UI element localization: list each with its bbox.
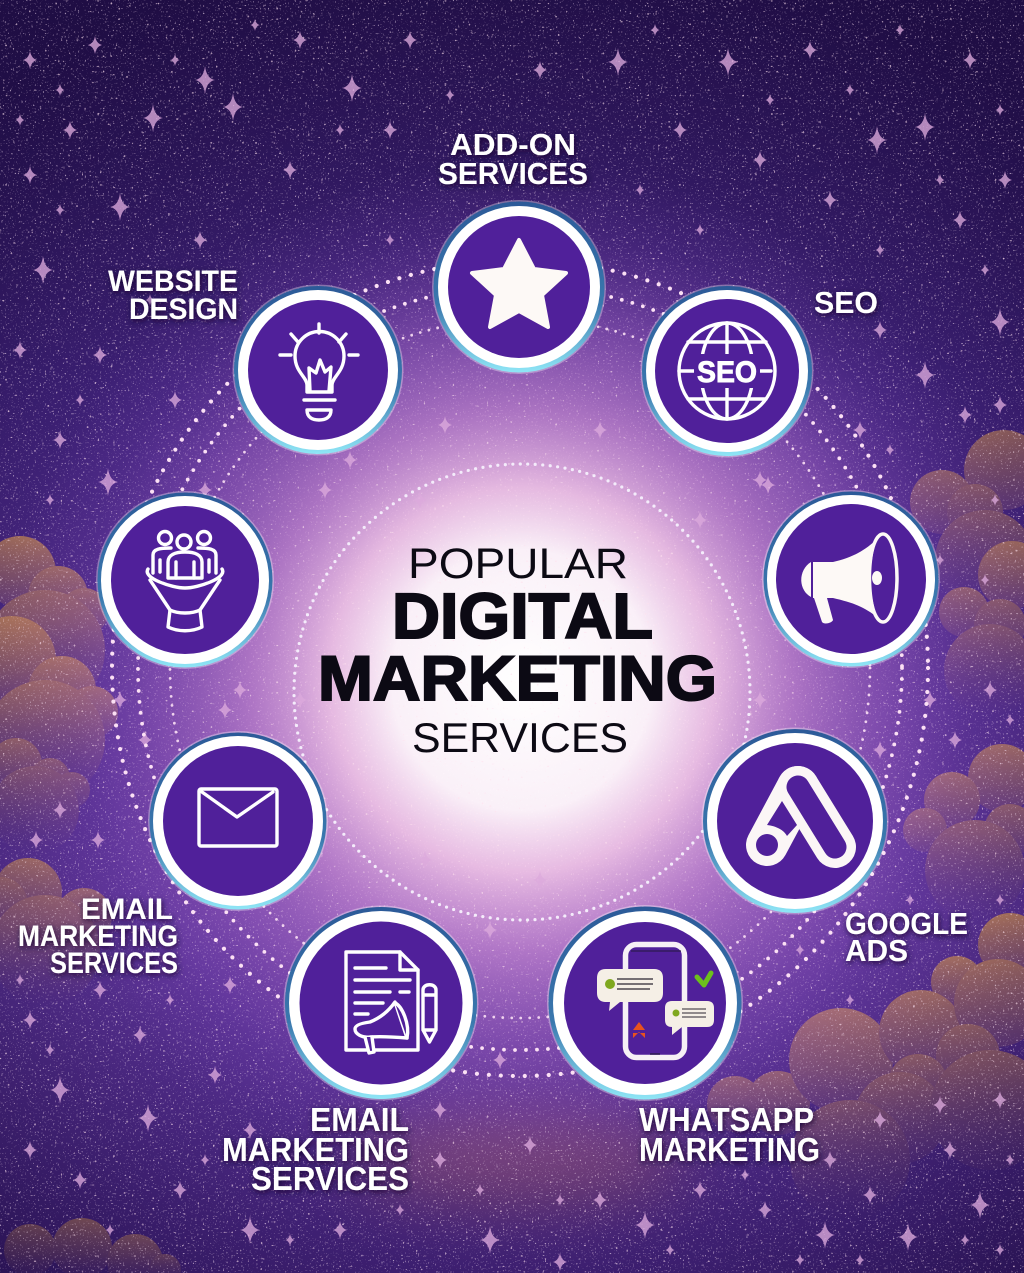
label: add-on services <box>438 127 588 191</box>
badge: whatsapp phone <box>547 905 743 1101</box>
center title <box>318 540 717 761</box>
label: website design: DESIGN <box>129 293 238 326</box>
badge: funnel <box>96 491 274 669</box>
icon: seo globe <box>679 323 775 419</box>
dotted orbit rings <box>112 260 928 1076</box>
badge: megaphone <box>762 490 940 668</box>
label: website design: WEBSITE <box>108 265 238 298</box>
label: website design <box>108 265 238 326</box>
label: email marketing services bottom: MARKETING <box>222 1131 409 1168</box>
label: whatsapp marketing: MARKETING <box>639 1131 820 1168</box>
label: email marketing services bottom <box>222 1101 409 1197</box>
label: whatsapp marketing <box>639 1101 820 1168</box>
label: email marketing services left: MARKETING <box>18 920 178 953</box>
clouds <box>0 430 1024 1273</box>
label: seo: SEO <box>814 285 878 320</box>
badge: content marketing <box>284 906 478 1100</box>
label: email marketing services bottom: EMAIL <box>310 1101 409 1138</box>
icon: star <box>472 240 566 327</box>
icon: envelope <box>199 789 277 846</box>
center title: POPULAR <box>408 540 628 588</box>
icon: ads logo <box>756 787 835 856</box>
icon: light bulb <box>280 324 358 420</box>
label: add-on services: SERVICES <box>438 156 588 191</box>
center title: MARKETING <box>318 644 717 714</box>
label: email marketing services bottom: SERVICES <box>251 1160 409 1197</box>
badge: seo globe <box>640 284 814 458</box>
badge: email <box>148 731 328 911</box>
label: whatsapp marketing: WHATSAPP <box>639 1101 814 1138</box>
icon: seo globe: SEO <box>697 356 757 389</box>
badge: website design bulb <box>232 284 404 456</box>
icon: megaphone <box>801 534 897 623</box>
label: google ads <box>845 906 968 968</box>
center title: DIGITAL <box>392 580 653 652</box>
label: google ads: GOOGLE <box>845 906 968 941</box>
badge: add-on services star <box>432 200 606 374</box>
center title: SERVICES <box>412 714 628 761</box>
label: email marketing services left: SERVICES <box>50 947 178 980</box>
icon: people in funnel <box>147 532 223 631</box>
label: email marketing services left <box>18 893 178 980</box>
label: email marketing services left: EMAIL <box>81 893 173 926</box>
icon: document, megaphone and pencil <box>346 952 436 1053</box>
icon: phone with chat bubbles <box>597 944 714 1058</box>
badge: google ads <box>702 728 888 914</box>
label: google ads: ADS <box>845 933 908 968</box>
label: add-on services: ADD-ON <box>450 127 576 162</box>
